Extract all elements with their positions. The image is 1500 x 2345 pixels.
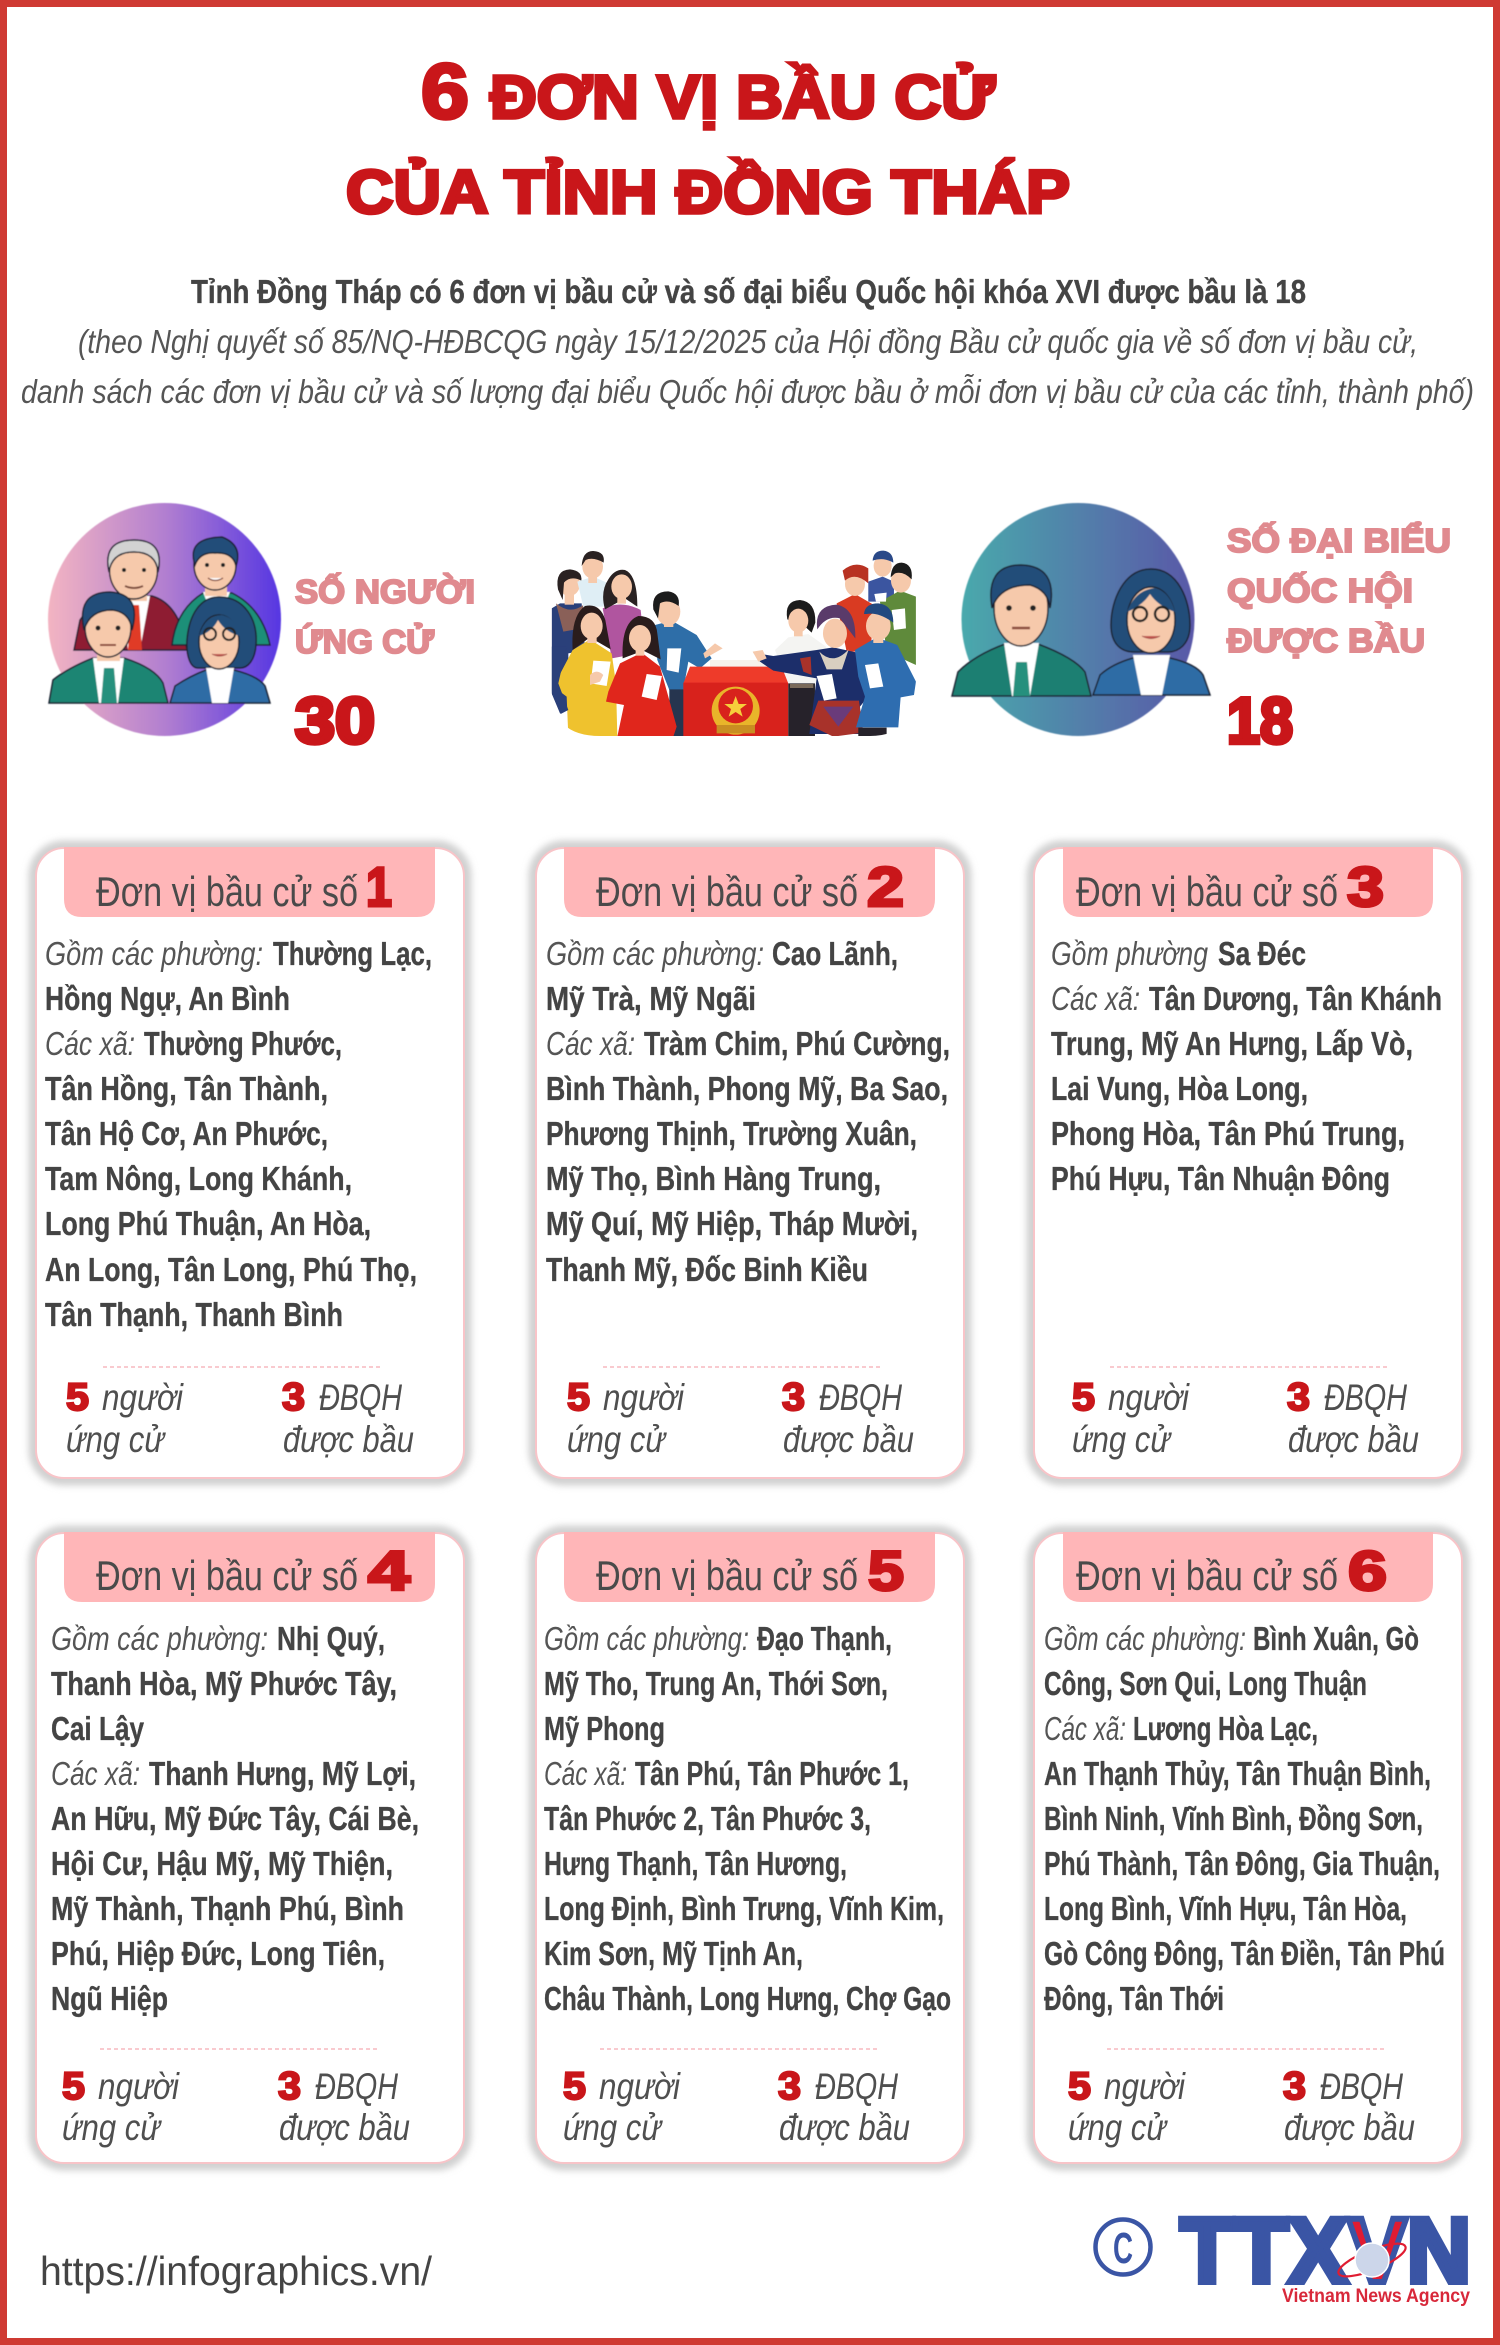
wards and communes list 5: Tân Phú, Tân Phước 1, <box>635 1755 909 1792</box>
intro text block: Tỉnh Đồng Tháp có 6 đơn vị bầu cử và số đại biểu Quốc hội khóa XVI được bầu là 18 <box>191 273 1306 310</box>
stats 1: 5 <box>66 1376 89 1419</box>
header: constituency 5 <box>564 1532 935 1602</box>
stats 5: 3 <box>778 2065 801 2108</box>
wards and communes list 4: Gồm các phường: <box>51 1620 268 1657</box>
stats 3: được bầu <box>1288 1419 1419 1460</box>
title <box>346 47 1070 226</box>
wards and communes list 3: Phú Hựu, Tân Nhuận Đông <box>1051 1160 1390 1197</box>
panel: constituency 4 <box>36 1532 464 2163</box>
wards and communes list 3: Lai Vung, Hòa Long, <box>1051 1070 1308 1107</box>
wards and communes list 1: Tân Hộ Cơ, An Phước, <box>45 1115 328 1152</box>
panel: constituency 6 <box>1034 1532 1462 2163</box>
wards and communes list 2: Thanh Mỹ, Đốc Binh Kiều <box>546 1251 868 1288</box>
stats 1: 3 <box>282 1376 305 1419</box>
wards and communes list 6 <box>1044 1620 1445 2017</box>
stats 6: ứng cử <box>1068 2107 1168 2148</box>
wards and communes list 4: Phú, Hiệp Đức, Long Tiên, <box>51 1935 385 1972</box>
stats 4: 3 <box>278 2065 301 2108</box>
stats 2: ứng cử <box>567 1419 667 1460</box>
stats 2: ĐBQH <box>819 1377 902 1418</box>
stats 6: được bầu <box>1284 2107 1415 2148</box>
wards and communes list 2 <box>546 935 950 1288</box>
stats 6: 5 <box>1068 2065 1091 2108</box>
wards and communes list 6: Đông, Tân Thới <box>1044 1980 1224 2017</box>
header: constituency 1: 1 <box>366 855 392 918</box>
wards and communes list 1: Tam Nông, Long Khánh, <box>45 1160 352 1197</box>
illustration: voters around ballot box <box>552 551 916 738</box>
wards and communes list 3: Trung, Mỹ An Hưng, Lấp Vò, <box>1051 1025 1413 1062</box>
stats 1: người <box>102 1377 185 1418</box>
header: constituency 6: 6 <box>1348 1539 1387 1602</box>
wards and communes list 1 <box>45 935 432 1333</box>
header: constituency 2 <box>564 847 935 918</box>
wards and communes list 1: An Long, Tân Long, Phú Thọ, <box>45 1251 417 1288</box>
stats 5 <box>563 2065 910 2148</box>
wards and communes list 5: Châu Thành, Long Hưng, Chợ Gạo <box>544 1980 951 2017</box>
header: constituency 6: Đơn vị bầu cử số <box>1076 1552 1338 1599</box>
header: constituency 3 <box>1063 847 1433 918</box>
header: constituency 4: 4 <box>368 1539 410 1602</box>
wards and communes list 2: Phương Thịnh, Trường Xuân, <box>546 1115 917 1152</box>
wards and communes list 4: Các xã: <box>51 1755 140 1792</box>
wards and communes list 5: Mỹ Phong <box>544 1710 665 1747</box>
wards and communes list 5: Hưng Thạnh, Tân Hương, <box>544 1845 847 1882</box>
wards and communes list 3: Sa Đéc <box>1218 935 1306 972</box>
stats 1 <box>66 1376 414 1460</box>
title: ĐƠN VỊ BẦU CỬ <box>490 63 995 131</box>
wards and communes list 6: Các xã: <box>1044 1710 1126 1747</box>
wards and communes list 5: Kim Sơn, Mỹ Tịnh An, <box>544 1935 803 1972</box>
wards and communes list 4: Thanh Hòa, Mỹ Phước Tây, <box>51 1665 397 1702</box>
wards and communes list 5: Mỹ Tho, Trung An, Thới Sơn, <box>544 1665 888 1702</box>
stats 5: ĐBQH <box>815 2066 898 2107</box>
header: constituency 6 <box>1063 1532 1433 1602</box>
wards and communes list 2: Cao Lãnh, <box>772 935 898 972</box>
stats 3: 5 <box>1072 1376 1095 1419</box>
wards and communes list 5: Các xã: <box>544 1755 627 1792</box>
wards and communes list 1: Long Phú Thuận, An Hòa, <box>45 1205 371 1242</box>
wards and communes list 1: Tân Hồng, Tân Thành, <box>45 1070 328 1107</box>
stats 2: 5 <box>567 1376 590 1419</box>
stat: deputies elected: SỐ ĐẠI BIỂU <box>1227 521 1451 559</box>
stats 5: 5 <box>563 2065 586 2108</box>
wards and communes list 2: Gồm các phường: <box>546 935 764 972</box>
intro text block <box>21 273 1474 410</box>
wards and communes list 4: Thanh Hưng, Mỹ Lợi, <box>149 1755 416 1792</box>
wards and communes list 3: Các xã: <box>1051 980 1140 1017</box>
header: constituency 5: 5 <box>868 1539 904 1602</box>
stats 1: ĐBQH <box>319 1377 402 1418</box>
icon: copyright mark <box>1096 2220 1150 2274</box>
wards and communes list 5: Long Định, Bình Trưng, Vĩnh Kim, <box>544 1890 944 1927</box>
wards and communes list 4: Cai Lậy <box>51 1710 145 1747</box>
wards and communes list 6: Gồm các phường: <box>1044 1620 1246 1657</box>
wards and communes list 4: Hội Cư, Hậu Mỹ, Mỹ Thiện, <box>51 1845 393 1882</box>
header: constituency 1 <box>64 847 435 918</box>
stats 2: được bầu <box>783 1419 914 1460</box>
wards and communes list 4: Mỹ Thành, Thạnh Phú, Bình <box>51 1890 404 1927</box>
wards and communes list 6: Công, Sơn Qui, Long Thuận <box>1044 1665 1367 1702</box>
wards and communes list 3 <box>1051 935 1442 1197</box>
header: constituency 2: Đơn vị bầu cử số <box>596 868 858 915</box>
stats 6 <box>1068 2065 1415 2148</box>
wards and communes list 1: Gồm các phường: <box>45 935 263 972</box>
stats 3: 3 <box>1287 1376 1310 1419</box>
stat: deputies elected: ĐƯỢC BẦU <box>1227 622 1425 659</box>
wards and communes list 1: Hồng Ngự, An Bình <box>45 980 290 1017</box>
icon: four candidates in gradient circle <box>48 503 281 736</box>
stat: deputies elected: 18 <box>1227 684 1293 757</box>
stats 3 <box>1072 1376 1419 1460</box>
stats 4 <box>62 2065 410 2148</box>
stats 1: ứng cử <box>66 1419 166 1460</box>
stats 3: ĐBQH <box>1324 1377 1407 1418</box>
stats 4: 5 <box>62 2065 85 2108</box>
wards and communes list 1: Tân Thạnh, Thanh Bình <box>45 1296 343 1333</box>
stat: candidates count: ỨNG CỬ <box>295 623 435 660</box>
header: constituency 4 <box>64 1532 435 1602</box>
stats 2 <box>567 1376 914 1460</box>
wards and communes list 4: Ngũ Hiệp <box>51 1980 168 2017</box>
source url: https://infographics.vn/ <box>40 2248 433 2294</box>
wards and communes list 4 <box>51 1620 419 2017</box>
wards and communes list 5: Tân Phước 2, Tân Phước 3, <box>544 1800 871 1837</box>
stats 2: người <box>603 1377 686 1418</box>
stat: candidates count: SỐ NGƯỜI <box>295 572 475 610</box>
stats 5: được bầu <box>779 2107 910 2148</box>
wards and communes list 5: Gồm các phường: <box>544 1620 749 1657</box>
stat: deputies elected: QUỐC HỘI <box>1227 571 1413 609</box>
stat: deputies elected <box>1227 521 1451 757</box>
header: constituency 3: 3 <box>1347 855 1384 918</box>
stats 1: được bầu <box>283 1419 414 1460</box>
stats 6: người <box>1104 2066 1187 2107</box>
icon: copyright mark: C <box>1113 2224 1133 2273</box>
panel: constituency 1 <box>36 847 464 1478</box>
title: CỦA TỈNH ĐỒNG THÁP <box>346 158 1070 226</box>
wards and communes list 2: Bình Thành, Phong Mỹ, Ba Sao, <box>546 1070 948 1107</box>
stats 4: ĐBQH <box>315 2066 398 2107</box>
wards and communes list 4: Nhị Quý, <box>277 1620 385 1657</box>
stats 4: người <box>98 2066 181 2107</box>
header: constituency 1: Đơn vị bầu cử số <box>96 868 358 915</box>
wards and communes list 1: Các xã: <box>45 1025 135 1062</box>
panel: constituency 2 <box>536 847 964 1478</box>
panel: constituency 3 <box>1034 847 1462 1478</box>
logo: TTXVN: Vietnam News Agency <box>1282 2286 1470 2307</box>
stats 6: 3 <box>1283 2065 1306 2108</box>
stats 5: ứng cử <box>563 2107 663 2148</box>
panel: constituency 5 <box>536 1532 964 2163</box>
wards and communes list 2: Mỹ Quí, Mỹ Hiệp, Tháp Mười, <box>546 1205 918 1242</box>
wards and communes list 6: Lương Hòa Lạc, <box>1133 1710 1318 1747</box>
wards and communes list 3: Gồm phường <box>1051 935 1209 972</box>
stat: candidates count: 30 <box>295 684 375 757</box>
stats 3: ứng cử <box>1072 1419 1172 1460</box>
wards and communes list 2: Mỹ Thọ, Bình Hàng Trung, <box>546 1160 881 1197</box>
wards and communes list 2: Các xã: <box>546 1025 635 1062</box>
stats 2: 3 <box>782 1376 805 1419</box>
wards and communes list 1: Thường Lạc, <box>273 935 432 972</box>
wards and communes list 5 <box>544 1620 951 2017</box>
logo: TTXVN: TTXVN <box>1180 2200 1471 2302</box>
stats 3: người <box>1108 1377 1191 1418</box>
wards and communes list 2: Tràm Chim, Phú Cường, <box>644 1025 950 1062</box>
wards and communes list 5: Đạo Thạnh, <box>757 1620 892 1657</box>
wards and communes list 1: Thường Phước, <box>144 1025 342 1062</box>
icon: two deputies in gradient circle <box>952 503 1210 736</box>
wards and communes list 6: Bình Xuân, Gò <box>1253 1620 1419 1657</box>
wards and communes list 3: Phong Hòa, Tân Phú Trung, <box>1051 1115 1405 1152</box>
stats 4: ứng cử <box>62 2107 162 2148</box>
wards and communes list 4: An Hữu, Mỹ Đức Tây, Cái Bè, <box>51 1800 419 1837</box>
stat: candidates count <box>295 572 475 757</box>
stats 4: được bầu <box>279 2107 410 2148</box>
stats 6: ĐBQH <box>1320 2066 1403 2107</box>
wards and communes list 2: Mỹ Trà, Mỹ Ngãi <box>546 980 756 1017</box>
title: 6 <box>421 47 469 135</box>
header: constituency 4: Đơn vị bầu cử số <box>96 1552 358 1599</box>
stats 5: người <box>599 2066 682 2107</box>
header: constituency 3: Đơn vị bầu cử số <box>1076 868 1338 915</box>
header: constituency 5: Đơn vị bầu cử số <box>596 1552 858 1599</box>
header: constituency 2: 2 <box>867 855 904 918</box>
